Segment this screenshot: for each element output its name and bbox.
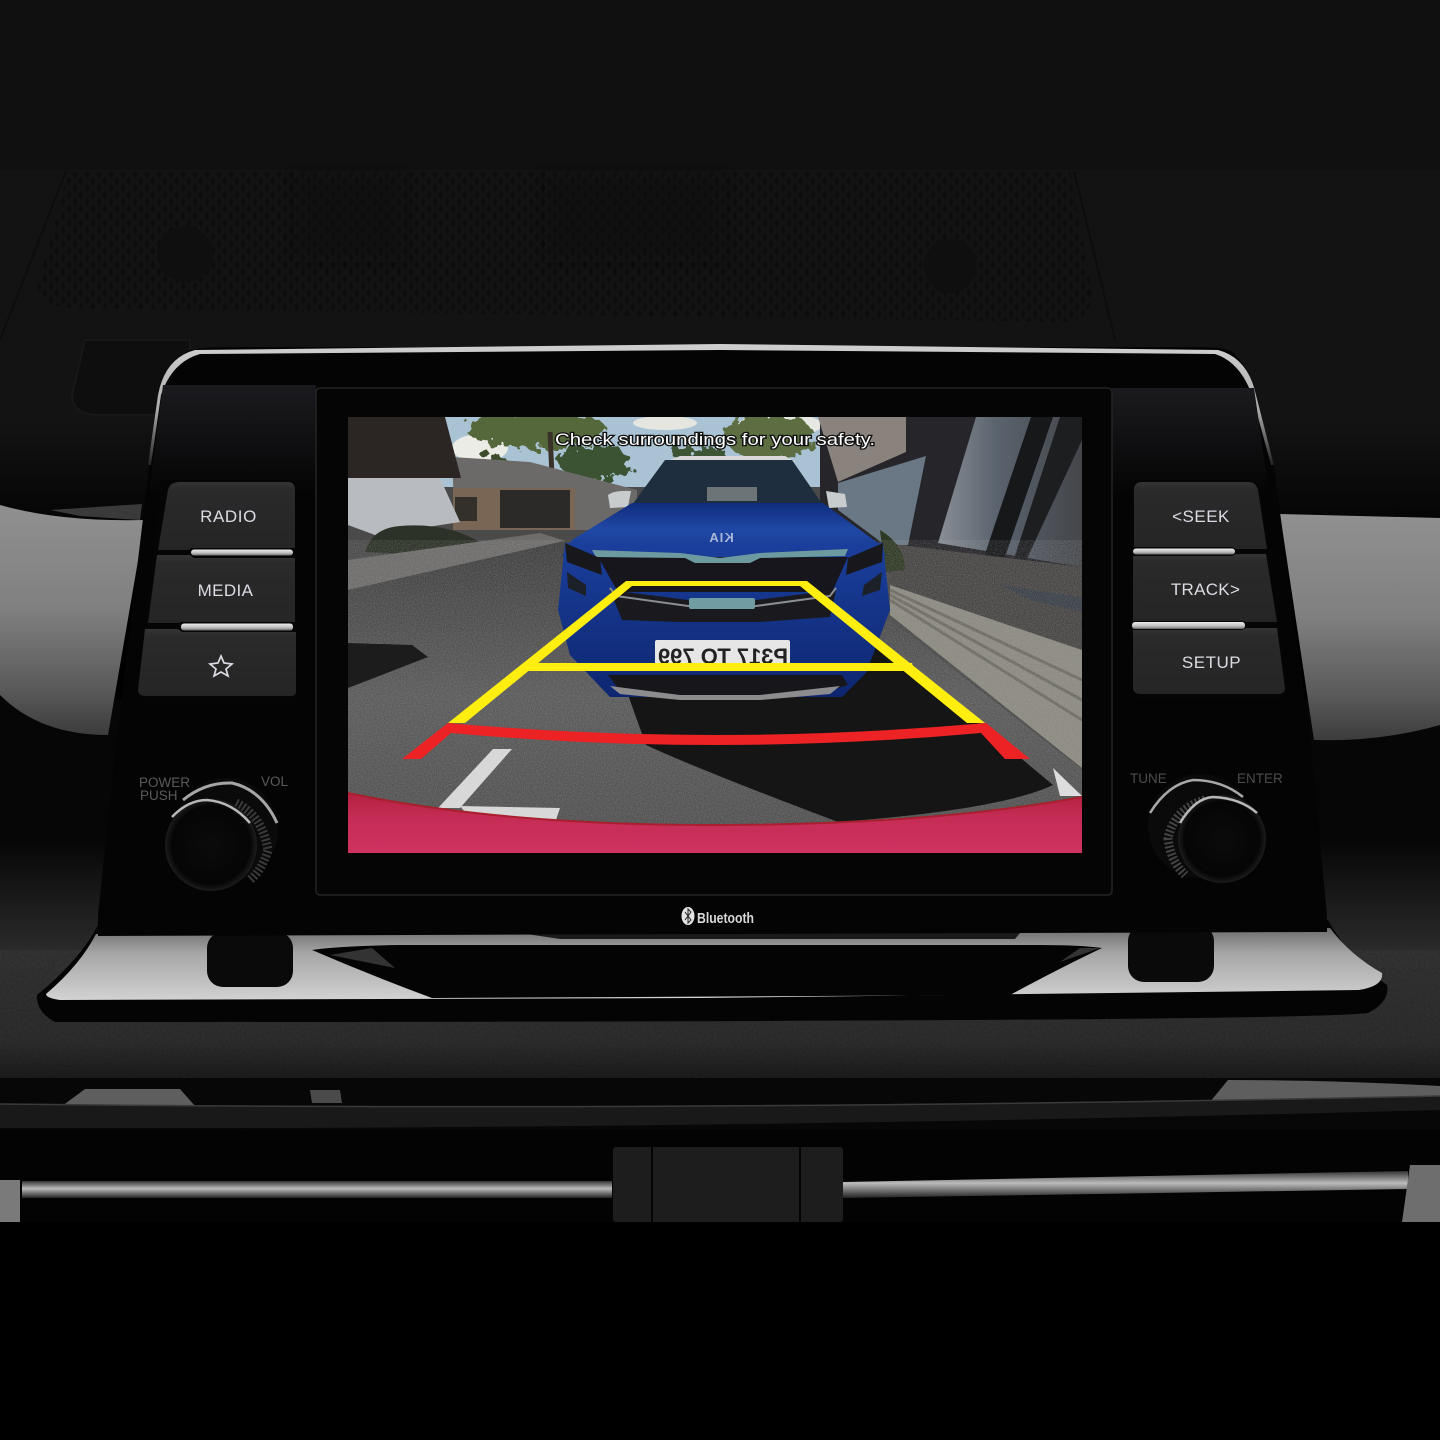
chrome bar end right <box>1402 1165 1440 1222</box>
roof area <box>0 0 1440 171</box>
yellow parking guide <box>448 581 985 723</box>
track divider <box>1132 622 1245 629</box>
media button: MEDIA <box>198 581 254 600</box>
lower grille <box>610 590 836 622</box>
left knob labels: POWER <box>139 775 190 790</box>
head unit <box>37 344 1387 1022</box>
seek button: <SEEK <box>1172 507 1230 526</box>
lower vent band <box>0 1130 1440 1222</box>
volume knob <box>165 778 278 891</box>
silver gloss lip <box>46 925 1382 1000</box>
media button <box>148 555 295 623</box>
left air vent recess <box>72 340 190 415</box>
centre vent tab <box>613 1147 843 1222</box>
left building <box>348 417 566 590</box>
number plate: P317 TO 799 <box>658 644 788 669</box>
mirrors <box>608 491 631 508</box>
right chrome bar <box>843 1171 1408 1198</box>
side shading left <box>0 840 110 955</box>
right button block <box>1132 480 1288 700</box>
black lip surround <box>37 920 1387 1022</box>
skid plate <box>610 686 840 700</box>
favourite button <box>138 629 296 696</box>
headlight left <box>565 543 602 575</box>
right building <box>818 417 1082 567</box>
lower bumper <box>608 675 848 697</box>
radio button <box>158 482 295 550</box>
right knob labels: ENTER <box>1237 771 1283 786</box>
fog area right <box>862 572 882 596</box>
padded dashboard left <box>0 504 145 735</box>
side shading right <box>1320 840 1440 955</box>
own car bumper <box>348 793 1082 853</box>
media divider <box>181 624 293 630</box>
left knob labels: VOL <box>261 774 289 789</box>
track button: TRACK> <box>1171 580 1240 599</box>
windscreen <box>632 460 823 505</box>
road <box>348 540 1082 800</box>
camera view screen <box>348 408 1082 853</box>
bluetooth logo: Bluetooth <box>697 910 754 927</box>
left knob labels: PUSH <box>140 788 178 803</box>
chrome top edge <box>148 344 1274 465</box>
teal accent <box>689 598 755 609</box>
upper dashboard <box>0 170 1440 420</box>
left button block <box>138 480 297 704</box>
hood <box>562 503 886 556</box>
right knob labels: TUNE <box>1130 771 1167 786</box>
padded dashboard right <box>1280 514 1440 740</box>
upper grille <box>598 557 848 592</box>
speaker grille panel <box>0 171 1115 340</box>
radio divider <box>191 550 293 556</box>
camera warning message: Check surroundings for your safety. <box>555 430 875 449</box>
track button <box>1133 554 1277 622</box>
red parking guide <box>402 723 1030 759</box>
right knob labels <box>1130 771 1283 786</box>
radio button: RADIO <box>200 507 257 526</box>
white road markings <box>438 749 1082 820</box>
tune knob <box>1148 774 1266 883</box>
fog area left <box>567 572 586 596</box>
number plate <box>655 640 790 663</box>
glossy black housing <box>98 347 1327 936</box>
roof <box>665 456 796 462</box>
upper dashboard shadow above pads <box>0 420 1440 520</box>
left chrome bar <box>22 1181 612 1198</box>
headlight right <box>846 543 883 575</box>
left road shadow <box>348 643 428 688</box>
front body <box>558 543 890 697</box>
road texture <box>348 540 1082 853</box>
screen bezel <box>316 388 1112 895</box>
housing right reflection <box>1112 388 1270 500</box>
grille chrome <box>592 549 848 563</box>
background building <box>452 457 637 530</box>
seek button <box>1134 482 1267 549</box>
setup button <box>1133 628 1285 694</box>
leather dashboard lower <box>0 950 1440 1080</box>
sky <box>440 413 825 487</box>
setup button: SETUP <box>1182 653 1241 672</box>
lower gloss trim <box>0 1078 1440 1130</box>
chrome bar end left <box>0 1180 20 1222</box>
sidewalk <box>880 530 1082 768</box>
blue SUV <box>558 456 890 700</box>
seek divider <box>1133 548 1235 554</box>
car shadow <box>627 640 1053 822</box>
dark lower dash band <box>0 700 1440 960</box>
housing left reflection <box>148 385 316 500</box>
trees <box>464 417 818 484</box>
grille lower trim <box>610 588 836 606</box>
bluetooth logo <box>682 907 754 927</box>
left knob labels <box>139 774 289 803</box>
rear view <box>707 487 757 501</box>
kia logo: KIA <box>708 530 734 545</box>
